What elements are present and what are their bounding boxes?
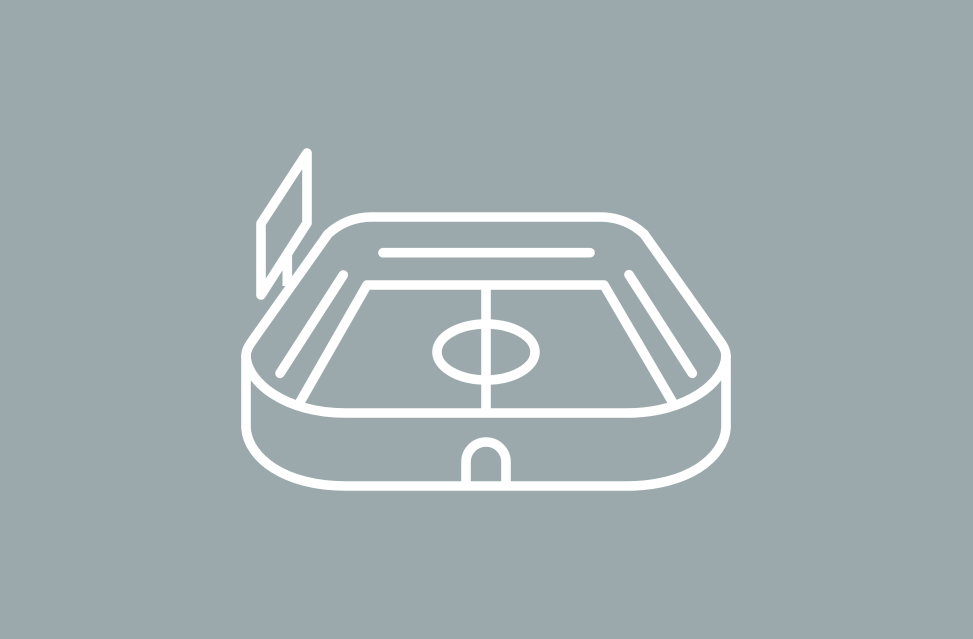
top stand bar [383,248,590,257]
right stand bar [629,275,692,373]
left stand bar [280,275,343,373]
icon: scoreboard flag [261,153,307,295]
pitch outline [300,285,673,403]
stadium outer wall [246,356,726,486]
icon: stadium [246,153,726,486]
pitch centre line [481,285,491,412]
stadium entrance gate [466,442,506,486]
stadium inner floor edge [246,356,726,413]
stadium outer rim [246,217,726,356]
pitch centre circle [437,324,535,380]
